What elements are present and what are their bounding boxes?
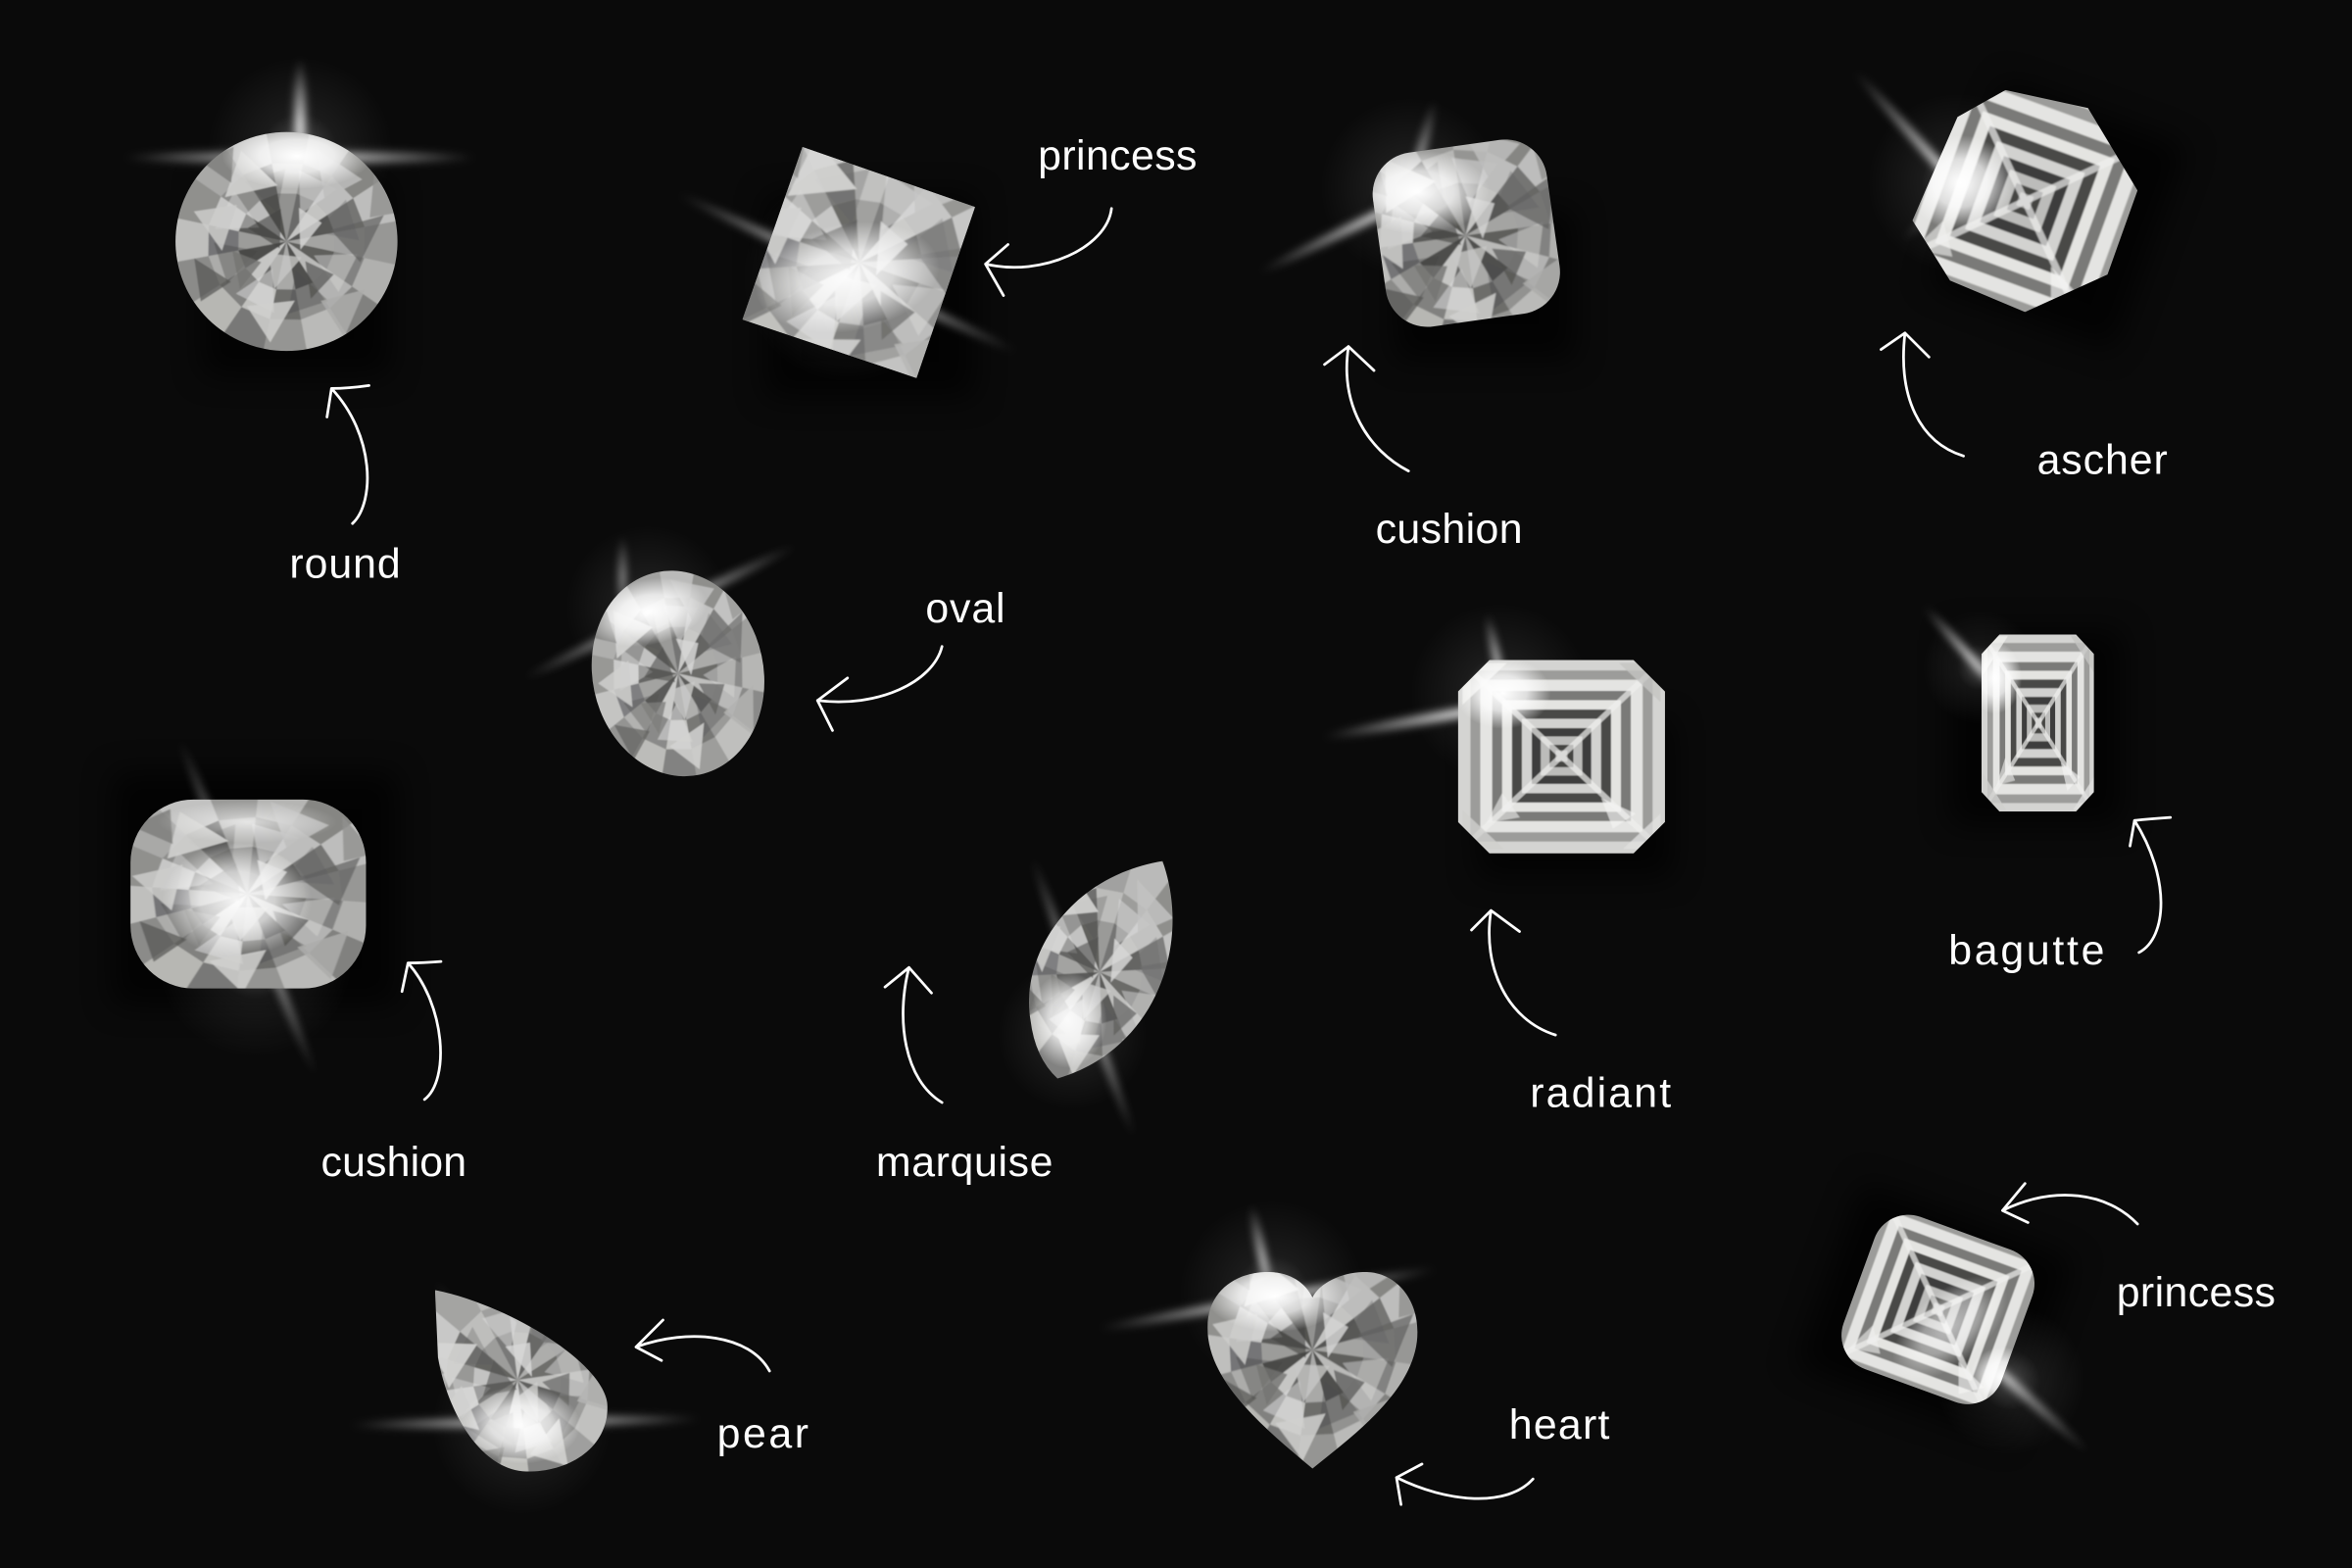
arrow: princess top: [986, 209, 1111, 296]
diamond: ascher: [1862, 80, 2137, 312]
diamond: marquise: [1019, 860, 1172, 1123]
arrow: radiant: [1472, 910, 1555, 1035]
diamond: radiant: [1334, 615, 1665, 854]
label: princess right: princess: [2117, 1269, 2276, 1316]
diamond: oval: [537, 539, 784, 776]
diamond: princess right: [1841, 1215, 2080, 1445]
label: radiant: radiant: [1530, 1070, 1671, 1117]
arrow: pear: [636, 1320, 769, 1371]
label: marquise: marquise: [876, 1139, 1053, 1186]
label: princess top: princess: [1038, 132, 1197, 179]
diamond: princess top: [693, 147, 1002, 378]
diamond: cushion left: [130, 759, 367, 1059]
arrow: princess right: [2002, 1184, 2137, 1224]
arrow: cushion left: [402, 961, 441, 1100]
label: ascher: ascher: [2037, 437, 2168, 484]
arrow: marquise: [885, 967, 942, 1102]
arrow: heart: [1396, 1464, 1533, 1504]
diamond: heart: [1113, 1209, 1422, 1468]
label: cushion top: cushion: [1376, 506, 1523, 553]
diamond: pear: [365, 1290, 686, 1488]
arrow: bagutte: [2130, 817, 2171, 953]
label: pear: pear: [717, 1410, 808, 1457]
label: heart: heart: [1509, 1401, 1609, 1448]
arrow: ascher: [1881, 333, 1964, 456]
diamond: cushion top: [1270, 106, 1560, 327]
arrow: round: [327, 385, 369, 523]
arrow: oval: [817, 647, 942, 730]
label: cushion left: cushion: [321, 1139, 466, 1186]
arrow: cushion top: [1325, 347, 1408, 471]
diamond: round: [137, 63, 463, 351]
label: round: round: [289, 540, 401, 587]
label: bagutte: bagutte: [1948, 927, 2104, 974]
label: oval: oval: [925, 585, 1005, 632]
diamond: bagutte: [1929, 612, 2094, 811]
